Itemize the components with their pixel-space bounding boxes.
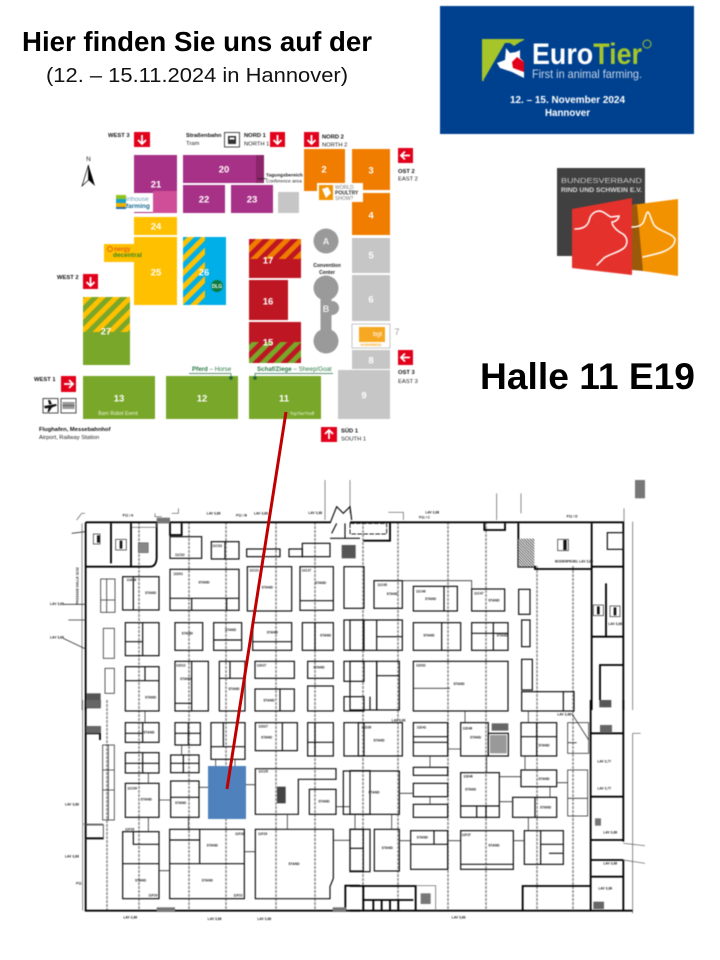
bottom-right quadrant booths: STAND xyxy=(382,846,393,850)
halls 2 to 4: 2 xyxy=(321,164,327,176)
bottom-right quadrant booths: LAV 3,88 xyxy=(603,830,617,834)
bottom-right quadrant booths: 11D39 xyxy=(362,725,371,729)
entrance: Nord 1: NORD 1 xyxy=(244,133,267,139)
bottom-left quadrant booths: LAV 3,88 xyxy=(208,917,222,921)
top-right quadrant booths: 11C47 xyxy=(474,591,484,595)
association name second line: RIND UND SCHWEIN E.V. xyxy=(561,188,642,194)
entrance: West 3 xyxy=(108,132,150,147)
halls 11 to 13: 13 xyxy=(114,394,124,404)
icon: airplane xyxy=(43,398,58,413)
fair dates: 12. – 15. November 2024 xyxy=(510,94,625,106)
logo: inhouse farming: inhouse xyxy=(126,196,149,203)
entrance: tram stop: Straßenbahn xyxy=(186,133,222,139)
bottom-right quadrant booths: STAND xyxy=(417,835,428,839)
halls 5 to 9: 6 xyxy=(368,294,374,306)
top-right quadrant booths: 11D32 xyxy=(416,664,426,668)
subtitle: date and place: (12. – 15.11.2024 in Hannover) xyxy=(46,65,348,87)
entrance: Ost 3: OST 3 xyxy=(398,370,416,376)
airport and railway station label: Airport, Railway Station xyxy=(39,435,99,441)
top-left quadrant booths: STAND xyxy=(262,585,273,589)
top-left quadrant booths: STAND xyxy=(315,581,327,585)
logo: EuroTier xyxy=(440,6,694,134)
top-right quadrant booths: STAND xyxy=(387,592,398,596)
halls 2 to 4: 4 xyxy=(368,210,374,222)
top-right quadrant booths: 11C46 xyxy=(416,590,426,594)
top-left quadrant booths: PASSAGE HALLE 11/12 xyxy=(75,567,79,604)
top-left quadrant booths: LAV 3,88 xyxy=(207,512,221,516)
bottom-left quadrant booths: STAND xyxy=(143,730,155,734)
icon: EuroTier animal mark xyxy=(482,39,524,81)
convention center: Center xyxy=(319,270,335,276)
top-right quadrant booths: LAV 3,88 xyxy=(608,622,622,626)
entrance: Süd 1: SOUTH 1 xyxy=(341,436,366,442)
top-left quadrant booths: LAV 3,88 xyxy=(254,512,268,516)
bottom-left quadrant booths: STAND xyxy=(207,844,218,848)
airport and railway station label: Flughafen, Messebahnhof xyxy=(39,427,111,433)
conference area label xyxy=(258,172,303,184)
entrance: tram stop: Tram xyxy=(186,141,199,147)
entrance: tram stop xyxy=(186,132,240,147)
halls 5 to 9: 9 xyxy=(361,390,367,402)
bottom-right quadrant booths: STAND xyxy=(368,790,380,794)
entrance: Nord 2 xyxy=(304,132,347,148)
registered mark xyxy=(643,40,651,48)
top-right quadrant booths: 11C45 xyxy=(377,583,387,587)
halls 11 to 13 xyxy=(83,376,321,419)
brand name: EuroTier xyxy=(532,38,642,71)
logo: inhouse farming xyxy=(115,193,153,212)
top-right quadrant booths: STAND xyxy=(453,682,465,686)
top-left quadrant booths: STAND xyxy=(267,630,278,634)
top-left quadrant booths: LAV 3,88 xyxy=(308,511,322,515)
convention center: B xyxy=(323,304,330,314)
bottom-right quadrant booths: LAV 3,77 xyxy=(597,759,611,763)
top-left quadrant booths: STAND xyxy=(228,687,240,691)
top-left quadrant booths xyxy=(50,480,364,711)
halls 24 to 27 xyxy=(83,217,226,365)
logo: World Poultry Show: SHOW? xyxy=(335,196,354,202)
logo: bgt Kongress: bgt xyxy=(373,331,382,338)
top-left quadrant booths: 11A08 xyxy=(127,578,136,582)
bottom-right quadrant booths: 11D46 xyxy=(463,726,472,730)
top-left quadrant booths: 11C02 xyxy=(175,553,185,557)
top-left quadrant booths: STAND xyxy=(145,591,157,595)
entrance: West 2 xyxy=(57,274,98,289)
logo: energy decentral: decentral xyxy=(113,252,142,259)
top-right quadrant booths: P11 / C xyxy=(419,515,431,519)
top-left quadrant booths: STAND xyxy=(225,628,237,632)
top-left quadrant booths: STAND xyxy=(198,580,210,584)
halls 20 to 23 xyxy=(134,155,299,213)
bottom-right quadrant booths: LAV 3,88 xyxy=(557,712,571,716)
entrance: Nord 1: NORTH 1 xyxy=(244,142,269,148)
bottom-left quadrant booths: STAND xyxy=(318,800,330,804)
red panel xyxy=(572,198,632,275)
highlighted booth E19 xyxy=(208,766,246,819)
entrance: Nord 2: NORTH 2 xyxy=(322,142,347,148)
halls 5 to 9: 7 xyxy=(394,327,400,337)
top-left quadrant booths: LAV 3,88 xyxy=(50,602,64,606)
bottom-right quadrant booths: STAND xyxy=(470,735,482,739)
bottom-right quadrant booths: STAND xyxy=(538,777,550,781)
bottom-left quadrant booths: P11 xyxy=(76,881,82,885)
top-left quadrant booths: P11 / B xyxy=(236,514,248,518)
bottom-left quadrant booths: 11F28 xyxy=(235,832,244,836)
entrance: Süd 1: SÜD 1 xyxy=(341,428,359,434)
logo: World Poultry Show: WORLD xyxy=(335,185,354,191)
halls 24 to 27: 25 xyxy=(151,268,162,278)
logo: World Poultry Show: POULTRY xyxy=(335,190,359,196)
halls 15 to 17 xyxy=(249,239,301,363)
top-left quadrant booths: STAND xyxy=(145,695,157,699)
booth number callout: Halle 11 E19 xyxy=(480,356,695,397)
bottom-left quadrant booths: LAV 3,88 xyxy=(257,917,271,921)
logo: bgt Kongress: KONGRESS xyxy=(361,343,382,347)
title: Hier finden Sie uns auf der xyxy=(22,26,372,57)
arrow: from hall 11 to booth E19 xyxy=(227,412,286,789)
bottom-right quadrant booths: LAV 3,88 xyxy=(603,862,617,866)
top-left quadrant booths: STAND xyxy=(313,665,325,669)
halls 20 to 23: 20 xyxy=(219,164,229,176)
top-left quadrant booths: STAND xyxy=(263,699,275,703)
convention center xyxy=(313,228,341,354)
halls 2 to 4: 3 xyxy=(368,166,374,176)
convention center: Convention xyxy=(313,263,341,269)
convention center: A xyxy=(323,236,330,246)
entrance: West 2: WEST 2 xyxy=(57,275,79,281)
bottom-right quadrant booths: LAV 3,88 xyxy=(452,915,466,919)
halls 11 to 13: Barn Robot Event xyxy=(98,411,138,417)
halls 20 to 23: 21 xyxy=(151,180,162,190)
halls 24 to 27: 27 xyxy=(101,326,111,338)
icon: north arrow: N xyxy=(86,156,91,163)
animal outlines xyxy=(575,211,675,265)
top-left quadrant booths: STAND xyxy=(182,631,193,635)
structural grid columns xyxy=(107,522,573,911)
top-left quadrant booths: STAND xyxy=(320,634,332,638)
bottom-right quadrant booths: 11D41 xyxy=(417,725,426,729)
label: sheep and goat area xyxy=(253,366,333,380)
entrance: West 1 xyxy=(34,376,76,392)
entrance: Ost 3 xyxy=(398,350,418,385)
entrance: Süd 1 xyxy=(321,427,366,442)
halls 24 to 27: 24 xyxy=(151,222,162,232)
top-left quadrant booths: 11D01 xyxy=(173,572,183,576)
top-right quadrant booths: STAND xyxy=(423,634,435,638)
entrance: West 3: WEST 3 xyxy=(108,133,130,139)
bottom-right quadrant booths: LAV 3,77 xyxy=(597,786,611,790)
top-left quadrant booths: 11C03 xyxy=(212,544,222,548)
halls 11 to 13: TopTierTreff xyxy=(290,411,315,416)
top-left quadrant booths: 11D27 xyxy=(257,664,266,668)
bottom-left quadrant booths: 11F20 xyxy=(148,894,158,898)
bottom-left quadrant booths: 11C09 xyxy=(127,786,137,790)
halls 11 to 13: 11 xyxy=(279,394,290,404)
tagline: First in animal farming. xyxy=(532,67,642,81)
entrance: Nord 1 xyxy=(244,132,285,148)
bottom-left quadrant booths: 11F28 xyxy=(125,828,134,832)
fair city: Hannover xyxy=(545,107,590,119)
site map of fairground xyxy=(34,132,418,442)
halls 20 to 23: 23 xyxy=(247,194,257,206)
overlap shadow xyxy=(632,205,643,271)
bottom-right quadrant booths xyxy=(343,700,645,919)
halls 5 to 9 xyxy=(338,238,400,419)
entrance: West 1: WEST 1 xyxy=(34,377,56,383)
bottom-right quadrant booths: 11F37 xyxy=(462,833,471,837)
halls 24 to 27: 26 xyxy=(199,268,209,278)
logo: energy decentral: nergy xyxy=(114,247,131,253)
bottom-left quadrant booths: LAV 3,88 xyxy=(123,915,137,919)
halls 20 to 23: 22 xyxy=(199,194,209,206)
halls 15 to 17: 17 xyxy=(263,256,273,266)
icon: train xyxy=(61,398,76,413)
top-right quadrant booths: BODENPEGEL LAV 3,88 xyxy=(555,559,593,563)
top-right quadrant booths: LAV 3,88 xyxy=(425,510,439,514)
entrance: Ost 2 xyxy=(398,148,418,182)
top-left quadrant booths: 11D12 xyxy=(176,664,186,668)
orange panel xyxy=(632,199,678,276)
halls 15 to 17: 16 xyxy=(263,296,273,308)
logo: inhouse farming: farming xyxy=(126,203,150,210)
label: sheep and goat area: Schaf/Ziege – Sheep/Goat xyxy=(257,366,332,373)
bottom-left quadrant booths: 11D27 xyxy=(258,724,268,728)
bottom-left quadrant booths: STAND xyxy=(175,801,187,805)
floor plan of hall 11 xyxy=(50,480,645,921)
bottom-left quadrant booths: STAND xyxy=(202,879,213,883)
entrance: Ost 2: OST 2 xyxy=(398,169,415,175)
bottom-right quadrant booths: LAV 3,88 xyxy=(598,886,612,890)
top-left quadrant booths: P11 / A xyxy=(123,514,134,518)
bottom-right quadrant booths: STAND xyxy=(488,844,500,848)
entrance: Ost 3: EAST 3 xyxy=(398,379,418,385)
bottom-right quadrant booths: STAND xyxy=(465,788,477,792)
bottom-left quadrant booths: STAND xyxy=(261,735,273,739)
halls 5 to 9: 8 xyxy=(368,356,374,366)
bottom-right quadrant booths: 11E46 xyxy=(463,774,473,778)
bottom-left quadrant booths: LAV 3,88 xyxy=(65,854,79,858)
top-left quadrant booths: STAND xyxy=(180,677,192,681)
halls 11 to 13: 12 xyxy=(197,394,207,404)
halls 2 to 4 xyxy=(304,149,390,235)
bottom-right quadrant booths: STAND xyxy=(540,805,552,809)
bottom-right quadrant booths: STAND xyxy=(538,744,550,748)
logo: World Poultry Show xyxy=(317,183,363,202)
top-left quadrant booths: LAV 3,88 xyxy=(50,636,64,640)
halls 24 to 27: DLG xyxy=(212,284,222,290)
bottom-left quadrant booths xyxy=(65,700,370,921)
label: horse area xyxy=(189,366,233,380)
top-right quadrant booths: STAND xyxy=(497,634,508,638)
bottom-left quadrant booths: 11F22 xyxy=(233,894,243,898)
conference area label: Tagungsbereich xyxy=(266,172,303,178)
entrance: Ost 2: EAST 2 xyxy=(398,176,418,182)
logo: bgt Kongress xyxy=(359,327,385,347)
bottom-left quadrant booths: STAND xyxy=(135,879,147,883)
conference area label: Conference area xyxy=(266,178,302,184)
top-left quadrant booths: 11C21 xyxy=(249,569,259,573)
halls 5 to 9: 5 xyxy=(368,250,374,262)
bottom-left quadrant booths: 11F29 xyxy=(258,832,267,836)
entrance: Nord 2: NORD 2 xyxy=(322,134,344,140)
logo: Bundesverband Rind und Schwein xyxy=(557,168,678,276)
halls 15 to 17: 15 xyxy=(263,338,274,348)
bottom-left quadrant booths: 11C25 xyxy=(258,770,268,774)
top-right quadrant booths xyxy=(350,480,645,711)
logo: energy decentral xyxy=(104,244,142,262)
bottom-left quadrant booths: STAND xyxy=(288,862,300,866)
top-left quadrant booths: 11C27 xyxy=(302,569,311,573)
top-right quadrant booths: STAND xyxy=(488,599,500,603)
bottom-left quadrant booths: STAND xyxy=(141,798,152,802)
top-right quadrant booths: STAND xyxy=(425,597,437,601)
label: horse area: Pferd – Horse xyxy=(192,366,232,373)
bottom-right quadrant booths: LAV 3,88 xyxy=(392,718,406,722)
association name: BUNDESVERBAND xyxy=(561,176,643,185)
icon: north arrow xyxy=(82,156,95,186)
airport and railway station label xyxy=(39,427,111,441)
bottom-left quadrant booths: LAV 3,88 xyxy=(65,802,79,806)
bottom-right quadrant booths: STAND xyxy=(373,739,385,743)
top-right quadrant booths: P11 / D xyxy=(567,514,578,518)
